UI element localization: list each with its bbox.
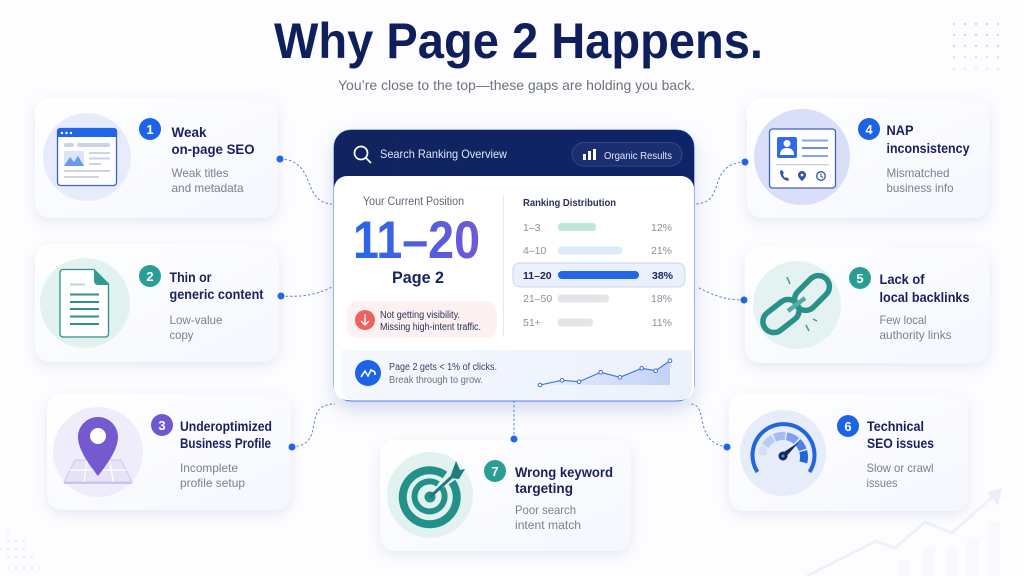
heading: Business Profile: [180, 435, 271, 451]
connectors: [276, 156, 748, 450]
ranking distribution chart: 11%: [652, 317, 672, 329]
heading: [867, 418, 934, 451]
heading: Weak: [172, 124, 207, 140]
ranking distribution chart: 4–10: [523, 245, 547, 257]
heading: [515, 464, 613, 496]
panel header: [334, 130, 694, 400]
badge 5: [849, 267, 871, 289]
ranking distribution chart: 18%: [651, 293, 672, 305]
heading: [886, 122, 970, 156]
badge 6: [837, 415, 859, 437]
panel: card 1 weak on-page SEO: [35, 98, 278, 218]
panel: card 4 NAP inconsistency: [747, 98, 989, 218]
decorative growth arrow bottom right: [807, 488, 1002, 576]
heading: local backlinks: [880, 289, 970, 305]
decorative dot grid top right: [953, 23, 999, 70]
description: Poor search: [515, 503, 576, 517]
description: [880, 313, 952, 342]
icon: document: [60, 270, 108, 337]
alert callout: Missing high-intent traffic.: [380, 322, 481, 333]
ranking distribution chart: 21%: [651, 245, 672, 257]
ranking distribution chart: 38%: [652, 270, 674, 282]
bottom insight band: Page 2 gets < 1% of clicks.: [389, 362, 497, 373]
title: Why Page 2 Happens.: [274, 13, 763, 69]
description: Few local: [880, 313, 926, 327]
description: and metadata: [172, 181, 244, 195]
description: profile setup: [180, 476, 245, 490]
badge 7: [484, 460, 506, 482]
badge 5: 5: [856, 271, 864, 286]
position number: 11–20: [353, 211, 480, 270]
description: [170, 313, 223, 342]
badge 6: 6: [844, 419, 852, 434]
description: [515, 503, 581, 532]
icon: trend circle: [355, 360, 381, 386]
badge 1: [139, 118, 161, 140]
description: Slow or crawl: [866, 461, 934, 475]
description: intent match: [515, 518, 581, 532]
description: Incomplete: [180, 461, 238, 475]
badge 1: 1: [146, 122, 154, 137]
description: business info: [886, 181, 954, 195]
bottom insight band: [342, 350, 692, 400]
panel: card 3 business profile: [47, 394, 291, 510]
description: [866, 461, 934, 490]
heading: SEO issues: [867, 435, 934, 451]
panel: card 5 local backlinks: [745, 247, 989, 363]
badge 2: [139, 265, 161, 287]
description: Mismatched: [886, 166, 950, 180]
description: issues: [866, 476, 898, 490]
ranking distribution chart: 51+: [523, 317, 541, 329]
icon: search: [354, 146, 371, 163]
description: copy: [170, 328, 194, 342]
heading: [880, 271, 970, 305]
heading: targeting: [515, 480, 573, 496]
badge 4: 4: [865, 122, 873, 137]
badge 3: 3: [158, 418, 166, 433]
heading: Thin or: [170, 269, 212, 285]
heading: [170, 269, 264, 302]
organic results pill: Organic Results: [604, 150, 672, 162]
badge 4: [858, 118, 880, 140]
icon: map pin: [64, 417, 132, 484]
description: Weak titles: [172, 166, 228, 180]
heading: NAP: [886, 122, 914, 138]
badge 2: 2: [146, 269, 154, 284]
heading: Wrong keyword: [515, 464, 613, 480]
ranking distribution chart: 1–3: [523, 222, 541, 234]
panel: card 2 thin content: [35, 244, 279, 362]
heading: Lack of: [880, 271, 925, 287]
ranking distribution chart: [513, 197, 685, 329]
alert callout: [347, 301, 497, 338]
header title: Search Ranking Overview: [380, 147, 507, 161]
heading: generic content: [170, 286, 264, 302]
badge 7: 7: [491, 464, 499, 479]
sparkline: [538, 359, 672, 387]
ranking distribution chart: Ranking Distribution: [523, 197, 616, 209]
icon: broken chain: [758, 271, 834, 337]
description: [886, 166, 954, 195]
icon: speed gauge: [752, 424, 814, 472]
heading: Underoptimized: [180, 418, 272, 434]
description: [180, 461, 245, 490]
description: authority links: [880, 328, 952, 342]
heading: [180, 418, 272, 451]
current position label: Your Current Position: [363, 196, 464, 208]
icon: business info card: [770, 129, 836, 188]
icon: browser window: [57, 128, 117, 186]
decorative dot grid bottom left: [0, 532, 41, 569]
heading: [172, 124, 255, 157]
badge 3: [151, 414, 173, 436]
heading: Technical: [867, 418, 924, 434]
ranking distribution chart: 11–20: [523, 270, 552, 282]
heading: inconsistency: [886, 140, 970, 156]
panel: card 7 wrong keyword targeting: [380, 440, 631, 551]
heading: on-page SEO: [172, 141, 255, 157]
ranking distribution chart: 21–50: [523, 293, 552, 305]
panel: search ranking overview: [334, 130, 694, 401]
organic results pill: [572, 142, 682, 166]
page label: Page 2: [392, 268, 444, 287]
alert callout: Not getting visibility.: [380, 310, 460, 321]
description: [172, 166, 244, 195]
description: Low-value: [170, 313, 223, 327]
bottom insight band: Break through to grow.: [389, 375, 483, 386]
panel: card 6 technical SEO: [729, 394, 968, 511]
icon: target with arrow: [403, 461, 465, 524]
subtitle: You’re close to the top—these gaps are holding you back.: [338, 77, 695, 93]
ranking distribution chart: 12%: [651, 222, 672, 234]
